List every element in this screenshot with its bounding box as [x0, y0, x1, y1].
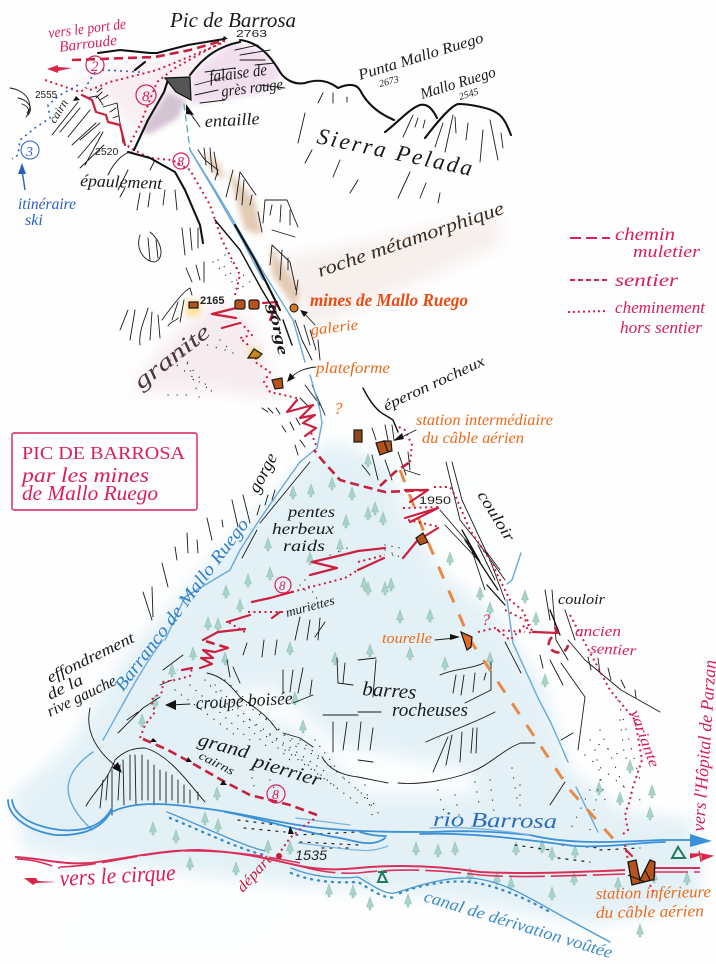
campsite symbol right: [672, 847, 685, 858]
pentes herbeux raids: pentes: [287, 504, 335, 521]
scree dots: [168, 255, 640, 830]
epaulement label: épaulement: [80, 171, 164, 193]
route number 8 mid: 8: [279, 578, 286, 593]
Mallo Ruego peak: 2545: [458, 87, 480, 103]
campsite symbol left: [378, 872, 387, 882]
effondrement label: effondrement: [44, 629, 138, 687]
vers le cirque: vers le cirque: [59, 860, 176, 891]
route number 8: 8: [177, 155, 184, 170]
galerie arrow: [300, 310, 315, 325]
ancien sentier: [575, 624, 637, 659]
falaise strokes: [195, 45, 285, 103]
station inferieure: station inférieure: [596, 882, 711, 903]
station inferieure: [596, 882, 711, 922]
croupe arrow: [165, 700, 190, 710]
arrow: to cirque: [24, 878, 57, 885]
title box: de Mallo Ruego: [22, 481, 158, 505]
effondrement scree: [86, 748, 205, 815]
icon: mid hut: [416, 533, 428, 545]
altitude 2165: 2165: [200, 295, 224, 307]
route number 2: [86, 56, 104, 75]
effondrement label: de la: [44, 672, 86, 704]
summit wedge: [165, 77, 191, 100]
barres rocheuses: barres: [362, 678, 417, 704]
station intermediaire label: du câble aérien: [422, 430, 524, 447]
falaise label: falaise de: [208, 60, 268, 86]
legend: chemin muletier: [570, 224, 700, 261]
falaise label: grès rouge: [220, 76, 284, 101]
title box: [12, 433, 197, 510]
vers le port de Barroude: vers le port de: [48, 17, 127, 42]
station intermediaire label: [416, 412, 553, 447]
station inferieure: du câble aérien: [596, 901, 704, 922]
icon: station intermediaire left: [354, 430, 362, 442]
icon: station intermediaire main: [376, 441, 392, 455]
canal label: canal de dérivation voûtée: [422, 887, 615, 962]
title box: PIC DE BARROSA: [22, 443, 185, 463]
icon: hut 2165: [189, 302, 198, 308]
question mark orange: ?: [334, 399, 343, 418]
route number 2: 2: [91, 59, 99, 75]
icon: hut cliff: [248, 349, 262, 358]
variante: variante: [626, 708, 662, 770]
rio Barrosa river: [8, 800, 712, 851]
arrow: to Barroude: [47, 65, 72, 73]
mountain hachures: [10, 88, 660, 805]
buildings and mines: [189, 300, 655, 885]
legend: cheminement hors sentier: hors sentier: [620, 318, 702, 337]
icon: mine huts: [235, 300, 259, 309]
couloir 2: couloir: [558, 592, 605, 608]
route number 3: 3: [25, 145, 33, 160]
station intermediaire label: station intermédiaire: [416, 412, 553, 429]
Barranco de Mallo Ruego: Barranco de Mallo Ruego: [110, 515, 253, 694]
entaille arrow: [188, 110, 200, 127]
station arrow: [393, 430, 416, 441]
eperon rocheux: éperon rocheux: [381, 353, 488, 415]
entaille label: entaille: [204, 109, 261, 131]
icon: lower cable station: [628, 860, 655, 885]
route number 8: [173, 153, 189, 170]
icon: galerie: [290, 304, 298, 312]
canal de dérivation: [167, 812, 610, 942]
icon: tourelle: [461, 632, 472, 650]
vers le port de Barroude: [48, 17, 129, 57]
ski arrow: [18, 163, 26, 190]
plateforme label: plateforme: [315, 360, 390, 377]
pentes herbeux raids: [272, 504, 335, 555]
pink wash near the summit: [70, 45, 500, 400]
title: Pic de Barrosa: [169, 8, 296, 32]
effondrement label: rive gauche: [44, 672, 119, 721]
altitude 1950: 1950: [419, 495, 451, 507]
gorge lower: gorge: [244, 449, 281, 496]
falaise label: [208, 58, 284, 102]
galerie label: galerie: [310, 317, 359, 339]
legend: [568, 224, 706, 337]
barres rocheuses: [362, 678, 468, 721]
icon: plateforme hut: [272, 378, 283, 389]
muriettes: muriettes: [284, 592, 336, 620]
route line: chemin muletier, sentier and hors sentier: [45, 40, 655, 895]
Barranco stream: [68, 104, 598, 832]
altitude 2520: 2520: [95, 146, 119, 158]
itineraire ski: itinéraire: [18, 196, 76, 213]
granite: granite: [129, 319, 215, 394]
summit altitude: 2763: [236, 28, 267, 40]
rio Barrosa label: rio Barrosa: [433, 807, 557, 833]
itineraire ski: [18, 196, 76, 229]
mines de Mallo Ruego: mines de Mallo Ruego: [310, 290, 468, 310]
legend: sentier: sentier: [615, 270, 679, 290]
question mark pink: ?: [482, 612, 490, 629]
barres rocheuses: rocheuses: [392, 700, 468, 721]
legend: chemin muletier: muletier: [633, 242, 700, 261]
croupe boisee: croupe boisée: [195, 688, 293, 713]
cairn label: cairn: [46, 97, 71, 126]
roche metamorphique: roche métamorphique: [315, 198, 507, 282]
route number 8 lower: 8: [272, 788, 279, 803]
Punta Mallo Ruego: Punta Mallo Ruego: [355, 29, 486, 84]
legend: chemin muletier: chemin: [615, 224, 675, 244]
altitude 1535: 1535: [295, 848, 328, 863]
trees: [138, 454, 690, 937]
falaise colour: [140, 42, 300, 358]
tourelle label: tourelle: [382, 631, 432, 647]
ridges: [98, 39, 511, 432]
legend: cheminement hors sentier: cheminement: [615, 298, 706, 317]
ancien sentier: ancien: [575, 624, 621, 640]
route number 8 top: 8: [142, 89, 150, 105]
route number 8 mid: [275, 577, 291, 593]
effondrement label: [44, 629, 138, 721]
cable line: [400, 470, 616, 842]
ski route: [12, 70, 140, 159]
vers le port de Barroude: Barroude: [58, 33, 118, 56]
plateforme arrow: [287, 367, 316, 382]
route number 8 top: [136, 85, 156, 105]
route number 3: [21, 141, 39, 160]
river bed pebbles: [238, 820, 640, 862]
Sierra Pelada: Sierra Pelada: [315, 123, 475, 181]
pentes herbeux raids: raids: [283, 538, 325, 555]
Mallo Ruego peak: Mallo Ruego: [417, 64, 498, 103]
gorge vertical: gorge: [264, 301, 291, 357]
route number 8 lower: [267, 785, 285, 803]
grand pierrier: [196, 730, 324, 791]
altitude 2555: 2555: [35, 90, 58, 101]
cairns label: cairns: [197, 748, 237, 778]
arrow: to Parzan: [690, 851, 712, 862]
effondrement arrow: [89, 708, 122, 773]
pentes herbeux raids: herbeux: [272, 521, 334, 538]
grand pierrier: pierrier: [248, 750, 324, 791]
Punta Mallo Ruego: 2673: [378, 74, 400, 90]
couloir 1: couloir: [474, 488, 518, 545]
tourelle arrow: [435, 634, 460, 640]
small cairns: [73, 36, 294, 834]
grand pierrier: grand: [196, 730, 252, 763]
legend: cheminement hors sentier: [568, 298, 706, 337]
title box: par les mines: [20, 463, 149, 487]
itineraire ski: ski: [25, 212, 43, 229]
blue valley wash: [12, 440, 700, 950]
depart label: départ: [234, 852, 276, 896]
road: [15, 850, 700, 877]
ancien sentier: sentier: [590, 641, 637, 659]
